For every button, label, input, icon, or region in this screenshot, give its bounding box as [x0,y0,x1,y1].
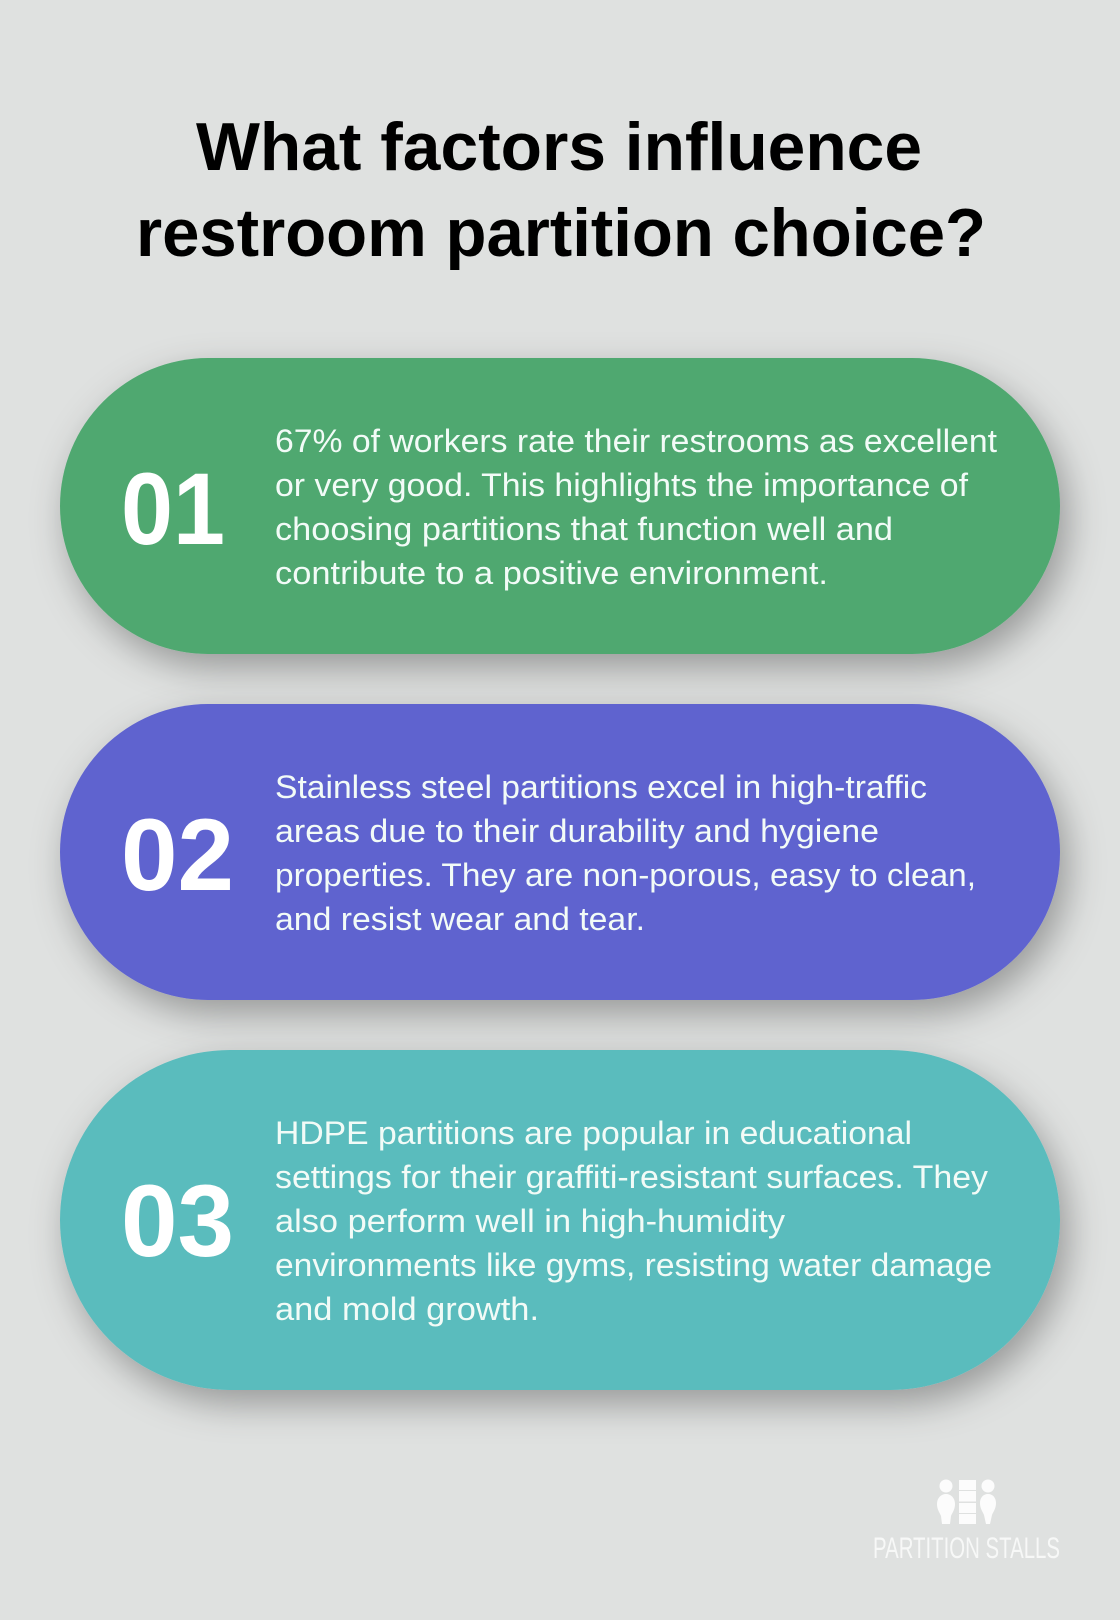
text block 01: choosing partitions that function well and [275,511,893,547]
panel: factor 03 [60,1050,1060,1390]
pill background 01 [60,358,1060,654]
text block 02: areas due to their durability and hygiene [275,813,879,849]
text block 03: HDPE partitions are popular in educational [275,1115,912,1151]
text block 03: environments like gyms, resisting water damage [275,1247,992,1283]
text block 03 [275,1115,992,1327]
title: restroom partition choice? [136,195,986,271]
number 03: 03 [121,1164,234,1278]
pill background 03 [60,1050,1060,1390]
panel: factor 01 [60,358,1060,654]
text block 03: also perform well in high-humidity [275,1203,785,1239]
text block 01: contribute to a positive environment. [275,555,828,591]
icon: two people and partition [937,1480,996,1524]
text block 03: settings for their graffiti-resistant surfaces. They [275,1159,988,1195]
text block 02: properties. They are non-porous, easy to clean, [275,857,976,893]
number 01: 01 [121,452,225,566]
text block 01: or very good. This highlights the importance of [275,467,968,503]
text block 03: and mold growth. [275,1291,539,1327]
text block 01: 67% of workers rate their restrooms as excellent [275,423,997,459]
logo: Partition Stalls [873,1480,1060,1565]
text block 02: and resist wear and tear. [275,901,645,937]
title [136,109,986,271]
pill background 02 [60,704,1060,1000]
number 02: 02 [121,798,234,912]
text block 02: Stainless steel partitions excel in high-traffic [275,769,927,805]
title: What factors influence [196,109,922,185]
text block 01 [275,423,997,591]
panel: factor 02 [60,704,1060,1000]
text block 02 [275,769,976,937]
